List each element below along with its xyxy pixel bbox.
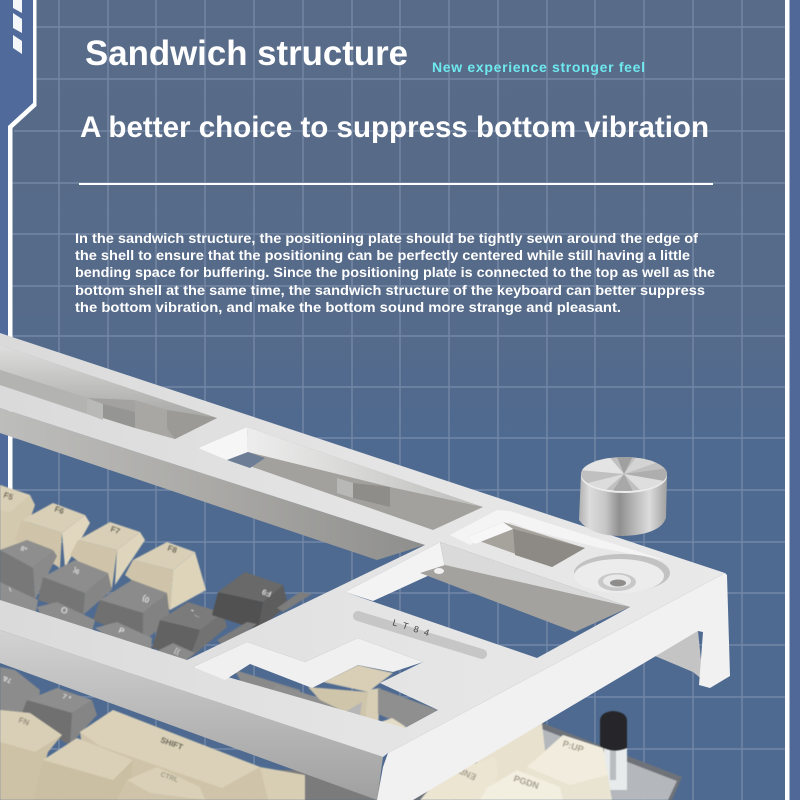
body paragraph: bending space for buffering. Since the positioning plate is connected to the top as well as the	[75, 265, 716, 280]
corner stripes	[13, 0, 22, 54]
key: I	[0, 582, 38, 612]
second slot with white rim	[198, 427, 483, 530]
keys visible through the T opening	[235, 665, 438, 735]
body paragraph: In the sandwich structure, the positioning plate should be tightly sewn around the edge of	[75, 231, 699, 246]
key: 7	[0, 667, 40, 722]
key: 7: 7&	[2, 674, 13, 684]
keyboard keys, left	[0, 485, 312, 668]
key: behind	[460, 723, 550, 800]
key: 0: 0)	[141, 594, 151, 605]
body paragraph: the bottom vibration, and make the bottom sound more strange and pleasant.	[75, 300, 621, 315]
keyboard keys, bottom right	[400, 711, 682, 800]
body paragraph: the shell to ensure that the positioning can be perfectly centered while still having a little	[75, 248, 691, 263]
key: 0	[93, 580, 170, 642]
key: P: P	[117, 626, 126, 636]
key: PGUP	[520, 735, 612, 800]
key: O: O	[59, 604, 69, 616]
long slot, upper rail	[0, 345, 217, 439]
key: 9: 9(	[72, 566, 81, 575]
key: 8 lower: 7 *	[61, 693, 72, 703]
key: END	[420, 757, 498, 800]
key: minus	[152, 602, 227, 658]
encoder seat	[574, 554, 670, 593]
plate front face	[0, 630, 383, 800]
key: F9: F9	[260, 587, 273, 599]
model label pill	[358, 616, 482, 654]
key: I: I	[8, 587, 13, 594]
key: F6: F6	[53, 504, 66, 516]
key: shift	[80, 710, 268, 800]
T opening white walls	[193, 638, 423, 688]
key: windows	[33, 738, 133, 800]
key: bracket	[153, 643, 195, 668]
key: 8: 8*	[19, 545, 28, 554]
plate right front face and leg	[377, 573, 730, 800]
title: Sandwich structure	[85, 34, 408, 73]
metal knob	[579, 452, 670, 536]
key: 9	[38, 560, 112, 615]
key: F8: F8	[166, 543, 179, 555]
key: shift: SHIFT	[159, 735, 184, 752]
knob top	[581, 457, 667, 491]
key: PGDN: PGDN	[512, 773, 540, 791]
key: F7	[70, 522, 145, 588]
rail inner face	[0, 408, 425, 560]
key: cream row	[230, 767, 305, 800]
key: F9	[212, 572, 288, 630]
plate top surface	[0, 333, 725, 757]
transparent case	[400, 722, 682, 800]
body paragraph	[75, 231, 716, 315]
key: PGUP: P:UP	[561, 738, 585, 755]
subtitle: A better choice to suppress bottom vibration	[80, 111, 709, 144]
key: PGDN	[480, 770, 563, 800]
tagline: New experience stronger feel	[432, 59, 645, 75]
key: ctrl: CTRL	[159, 771, 180, 785]
key: P	[95, 622, 152, 660]
body paragraph: bottom shell at the same time, the sandwich structure of the keyboard can better suppress	[75, 283, 705, 298]
switch cutout	[450, 510, 665, 567]
key: O	[37, 602, 95, 640]
model label pill: LT84	[391, 617, 436, 640]
keyboard keys, bottom left	[0, 667, 380, 800]
key: 8	[0, 540, 57, 600]
key: 8 lower	[20, 688, 97, 745]
key: partial gray	[217, 592, 312, 648]
switch with black stem	[600, 711, 627, 790]
key: F5	[0, 485, 35, 550]
big opening walls	[345, 542, 630, 632]
divider rule	[79, 183, 713, 185]
key: FN	[0, 710, 62, 800]
key: minus: - _	[189, 605, 204, 619]
positioning plate	[0, 333, 730, 800]
key: ctrl	[117, 767, 205, 800]
key: F5: F5	[2, 490, 15, 502]
key: F8	[125, 542, 206, 610]
key: bracket: [{	[173, 647, 181, 656]
key: FN: FN	[17, 715, 31, 728]
keys visible through the T opening: \ |	[305, 701, 316, 712]
key: F7: F7	[109, 524, 122, 536]
screw dot	[434, 568, 444, 574]
key: F6	[15, 503, 90, 568]
key: END: END	[456, 765, 478, 782]
